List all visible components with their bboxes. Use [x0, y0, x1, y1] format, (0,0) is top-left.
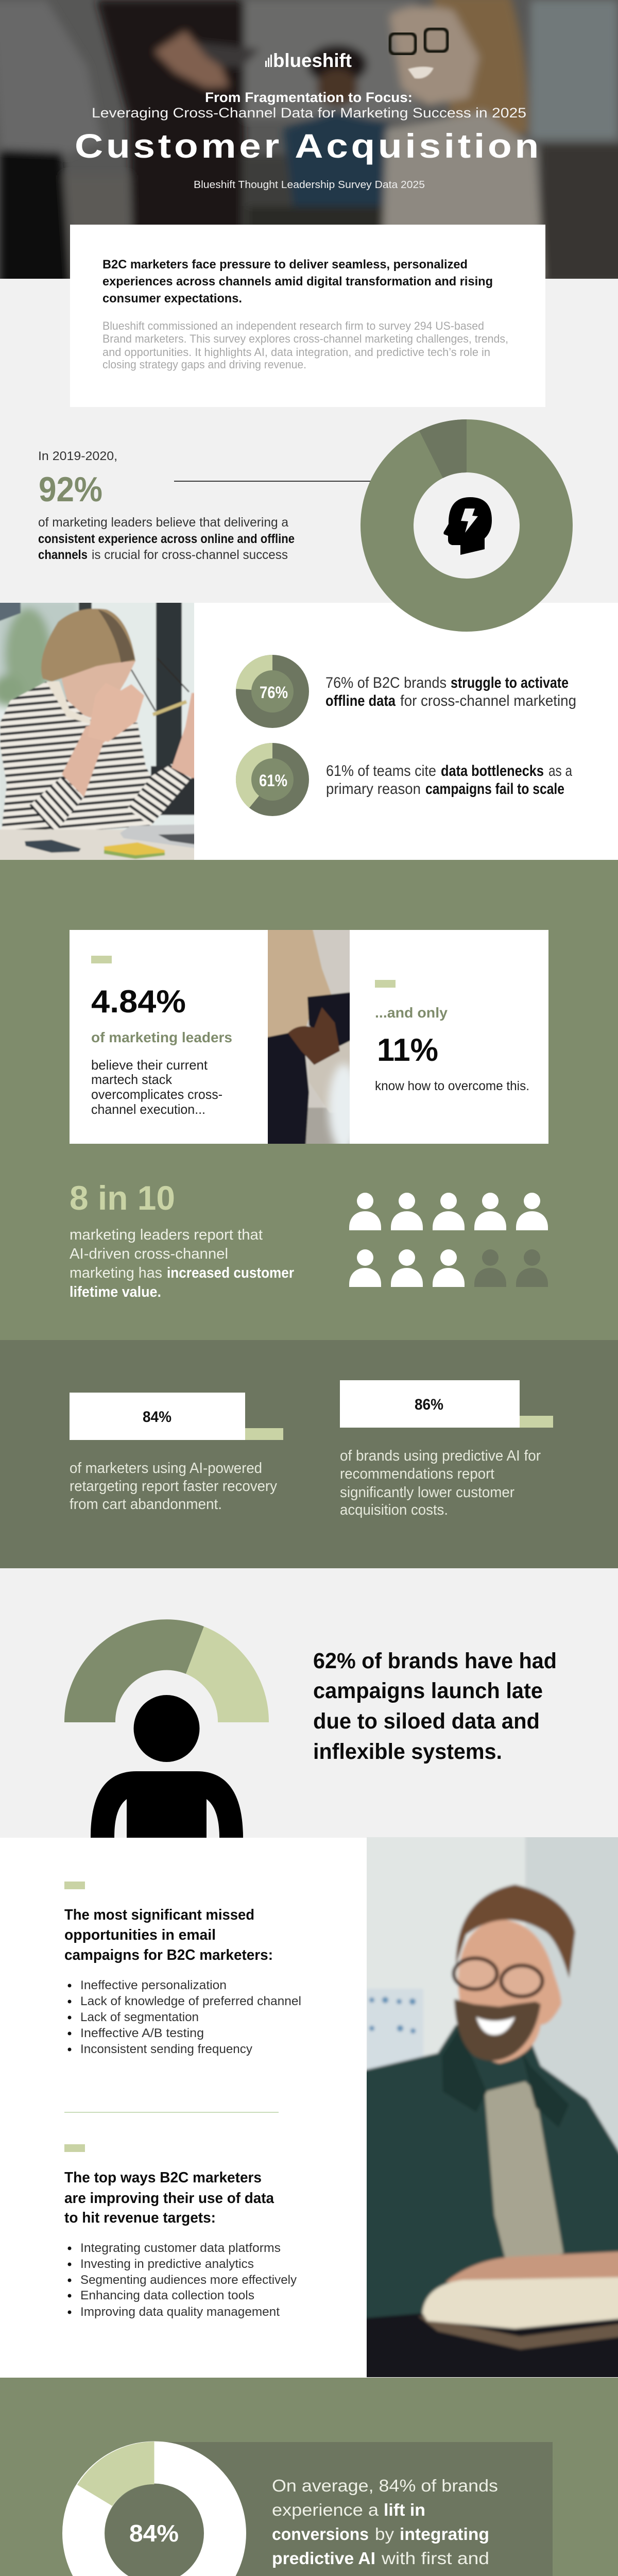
block: top ways to improve: to hit revenue targets: [64, 2210, 216, 2226]
donut chart: 84%: 84% [129, 2520, 179, 2547]
block: missed opportunities: Lack of knowledge of preferred channel [80, 1994, 301, 2008]
block: missed opportunities: Ineffective personalization [80, 1978, 227, 1992]
card: 4.84% of marketing leaders: channel execution... [91, 1101, 205, 1117]
stat text: 76%: 76% of B2C brands [325, 674, 447, 691]
bar stat: 86% [340, 1380, 553, 1428]
panel: activation challenges [0, 598, 576, 866]
card: 11% know how to overcome [350, 930, 548, 1144]
description: 84%: of marketers using AI-powered [70, 1460, 262, 1477]
donut chart: 84% [77, 2442, 225, 2576]
intro heading: experiences across channels amid digital transformation and rising [102, 275, 493, 289]
photo: stressed woman with glasses [0, 598, 199, 866]
statement text: with first and [381, 2549, 489, 2568]
block: missed opportunities [64, 1882, 301, 2056]
stat description: is crucial for cross-channel success [92, 548, 288, 562]
statement text: by [375, 2524, 394, 2544]
photo: clasped hands [268, 930, 350, 1144]
hero subtitle: Blueshift Thought Leadership Survey Data 2025 [194, 179, 425, 191]
stat text: 61% [326, 762, 572, 798]
card: 11% know how to overcome: 11% [377, 1032, 438, 1068]
donut chart: 92% [387, 419, 546, 605]
hero heading: report title: Leveraging Cross-Channel Data for Marketing Success in 2025 [92, 105, 526, 121]
card: 4.84% of marketing leaders: of marketing leaders [91, 1029, 232, 1045]
stat text: 61%: primary reason [326, 781, 421, 798]
card: 4.84% of marketing leaders [70, 930, 268, 1144]
card: 4.84% of marketing leaders: 4.84% [91, 984, 186, 1020]
block: top ways to improve: Enhancing data collection tools [80, 2289, 254, 2302]
stat number 92%: 92% [39, 470, 102, 509]
photo: smiling man with glasses [360, 1829, 618, 2385]
statement text: integrating [400, 2524, 489, 2544]
description: 86%: of brands using predictive AI for [340, 1448, 541, 1464]
block: top ways to improve: Integrating customer data platforms [80, 2241, 281, 2255]
statement text [313, 1649, 557, 1764]
panel: 92 percent stat [38, 419, 546, 605]
block: missed opportunities: campaigns for B2C marketers: [64, 1947, 273, 1963]
donut chart: 76%: 76% [260, 683, 288, 702]
card: 4.84% of marketing leaders: martech stack [91, 1072, 173, 1087]
block: missed opportunities: Inconsistent sending frequency [80, 2042, 252, 2056]
block: top ways to improve [64, 2144, 297, 2319]
stat description [38, 515, 295, 562]
stat text: 61%: 61% of teams cite [326, 762, 436, 779]
stat: 8 in 10: marketing leaders report that [70, 1227, 263, 1243]
donut chart: 61%: 61% [259, 771, 287, 790]
intro body text: and opportunities. It highlights AI, data integration, and predictive tech’s role in [102, 346, 490, 359]
statement text [272, 2476, 498, 2576]
hero photo: team laughing [0, 0, 618, 289]
intro heading: B2C marketers face pressure to deliver seamless, personalized [102, 258, 468, 272]
card: 4.84% of marketing leaders: believe their current [91, 1057, 208, 1073]
icon: head with lightning bolt [443, 497, 492, 555]
hero heading: report title [92, 90, 526, 121]
card: 4.84% of marketing leaders: overcomplicates cross- [91, 1087, 222, 1102]
statement text: inflexible systems. [313, 1739, 502, 1764]
icon: person silhouette [91, 1695, 243, 1838]
block: top ways to improve: Investing in predictive analytics [80, 2257, 254, 2271]
bar stat: 84%: 84% [143, 1409, 171, 1426]
panel: missed opportunities and improvements [0, 1829, 618, 2385]
description: 86%: recommendations report [340, 1466, 494, 1482]
description: 84%: from cart abandonment. [70, 1496, 222, 1513]
stat: 8 in 10 [70, 1179, 294, 1300]
stat: 8 in 10: lifetime value. [70, 1284, 161, 1300]
donut chart: 76% [236, 655, 309, 728]
block: missed opportunities: Lack of segmentation [80, 2010, 199, 2024]
panel: predictive AI dark band [0, 1340, 618, 1568]
block: top ways to improve: are improving their use of data [64, 2190, 274, 2207]
description: 84% [70, 1460, 277, 1513]
statement text: experience a [272, 2500, 379, 2519]
stat text: 61%: campaigns fail to scale [425, 781, 564, 798]
stat description: channels [38, 548, 88, 562]
card: 11% know how to overcome: ...and only [375, 1005, 448, 1021]
logo: blueshift: blueshift [273, 50, 352, 71]
gauge chart: 62% [64, 1619, 269, 1722]
panel: martech green section [0, 860, 618, 1340]
intro body text: Brand marketers. This survey explores cross-channel marketing challenges, trends, [102, 332, 508, 345]
statement text: conversions [272, 2524, 369, 2544]
statement text: 62% of brands have had [313, 1649, 557, 1673]
stat description: consistent experience across online and offline [38, 532, 295, 546]
hero heading: report title: From Fragmentation to Focus: [205, 90, 413, 105]
statement text: predictive AI [272, 2549, 375, 2568]
stat: 8 in 10: AI-driven cross-channel [70, 1246, 228, 1262]
description: 86%: significantly lower customer [340, 1484, 514, 1501]
stat: 8 in 10: marketing has [70, 1265, 162, 1281]
block: top ways to improve: Improving data quality management [80, 2305, 280, 2319]
panel: 84% lift green section [0, 2378, 618, 2576]
intro heading: consumer expectations. [102, 292, 242, 306]
statement text: lift in [384, 2500, 425, 2519]
block: missed opportunities: Ineffective A/B testing [80, 2026, 204, 2040]
description: 86% [340, 1448, 541, 1518]
block: top ways to improve: The top ways B2C marketers [64, 2170, 262, 2186]
intro heading [102, 258, 493, 306]
connector line [174, 481, 371, 482]
bar stat: 84% [70, 1393, 283, 1440]
stat text: 76%: struggle to activate [451, 674, 569, 691]
description: 86%: acquisition costs. [340, 1502, 448, 1518]
stat description: of marketing leaders believe that delivering a [38, 515, 288, 530]
stat text: 61%: as a [548, 762, 572, 779]
block: missed opportunities: The most significant missed [64, 1907, 254, 1923]
stat text: 76% [325, 674, 576, 709]
bar stat: 86%: 86% [415, 1396, 443, 1413]
block: missed opportunities: opportunities in email [64, 1927, 216, 1943]
icon array: 8 of 10 people [349, 1193, 548, 1287]
block: top ways to improve: Segmenting audiences more effectively [80, 2273, 297, 2287]
hero section [0, 0, 618, 289]
title: Customer Acquisition: Customer Acquisition [75, 127, 542, 165]
statement text: due to siloed data and [313, 1709, 540, 1734]
stat text: 61%: data bottlenecks [441, 762, 544, 779]
description: 84%: retargeting report faster recovery [70, 1478, 277, 1495]
statement text: campaigns launch late [313, 1679, 543, 1703]
panel: 62% late campaigns [0, 1568, 618, 1838]
stat intro: In 2019-2020, [38, 449, 117, 463]
stat: 8 in 10: 8 in 10 [70, 1179, 175, 1217]
intro body text [102, 319, 508, 371]
card: 11% know how to overcome: know how to overcome this. [375, 1079, 529, 1093]
donut chart: 61% [236, 743, 309, 816]
intro body text: closing strategy gaps and driving revenue. [102, 358, 306, 371]
stat text: 76%: for cross-channel marketing [400, 692, 576, 709]
stat: 8 in 10: increased customer [167, 1265, 294, 1281]
intro body text: Blueshift commissioned an independent research firm to survey 294 US-based [102, 319, 484, 332]
panel: white section background [0, 603, 618, 860]
statement text: On average, 84% of brands [272, 2476, 498, 2495]
stat text: 76%: offline data [325, 692, 396, 709]
panel: intro card [70, 225, 545, 407]
